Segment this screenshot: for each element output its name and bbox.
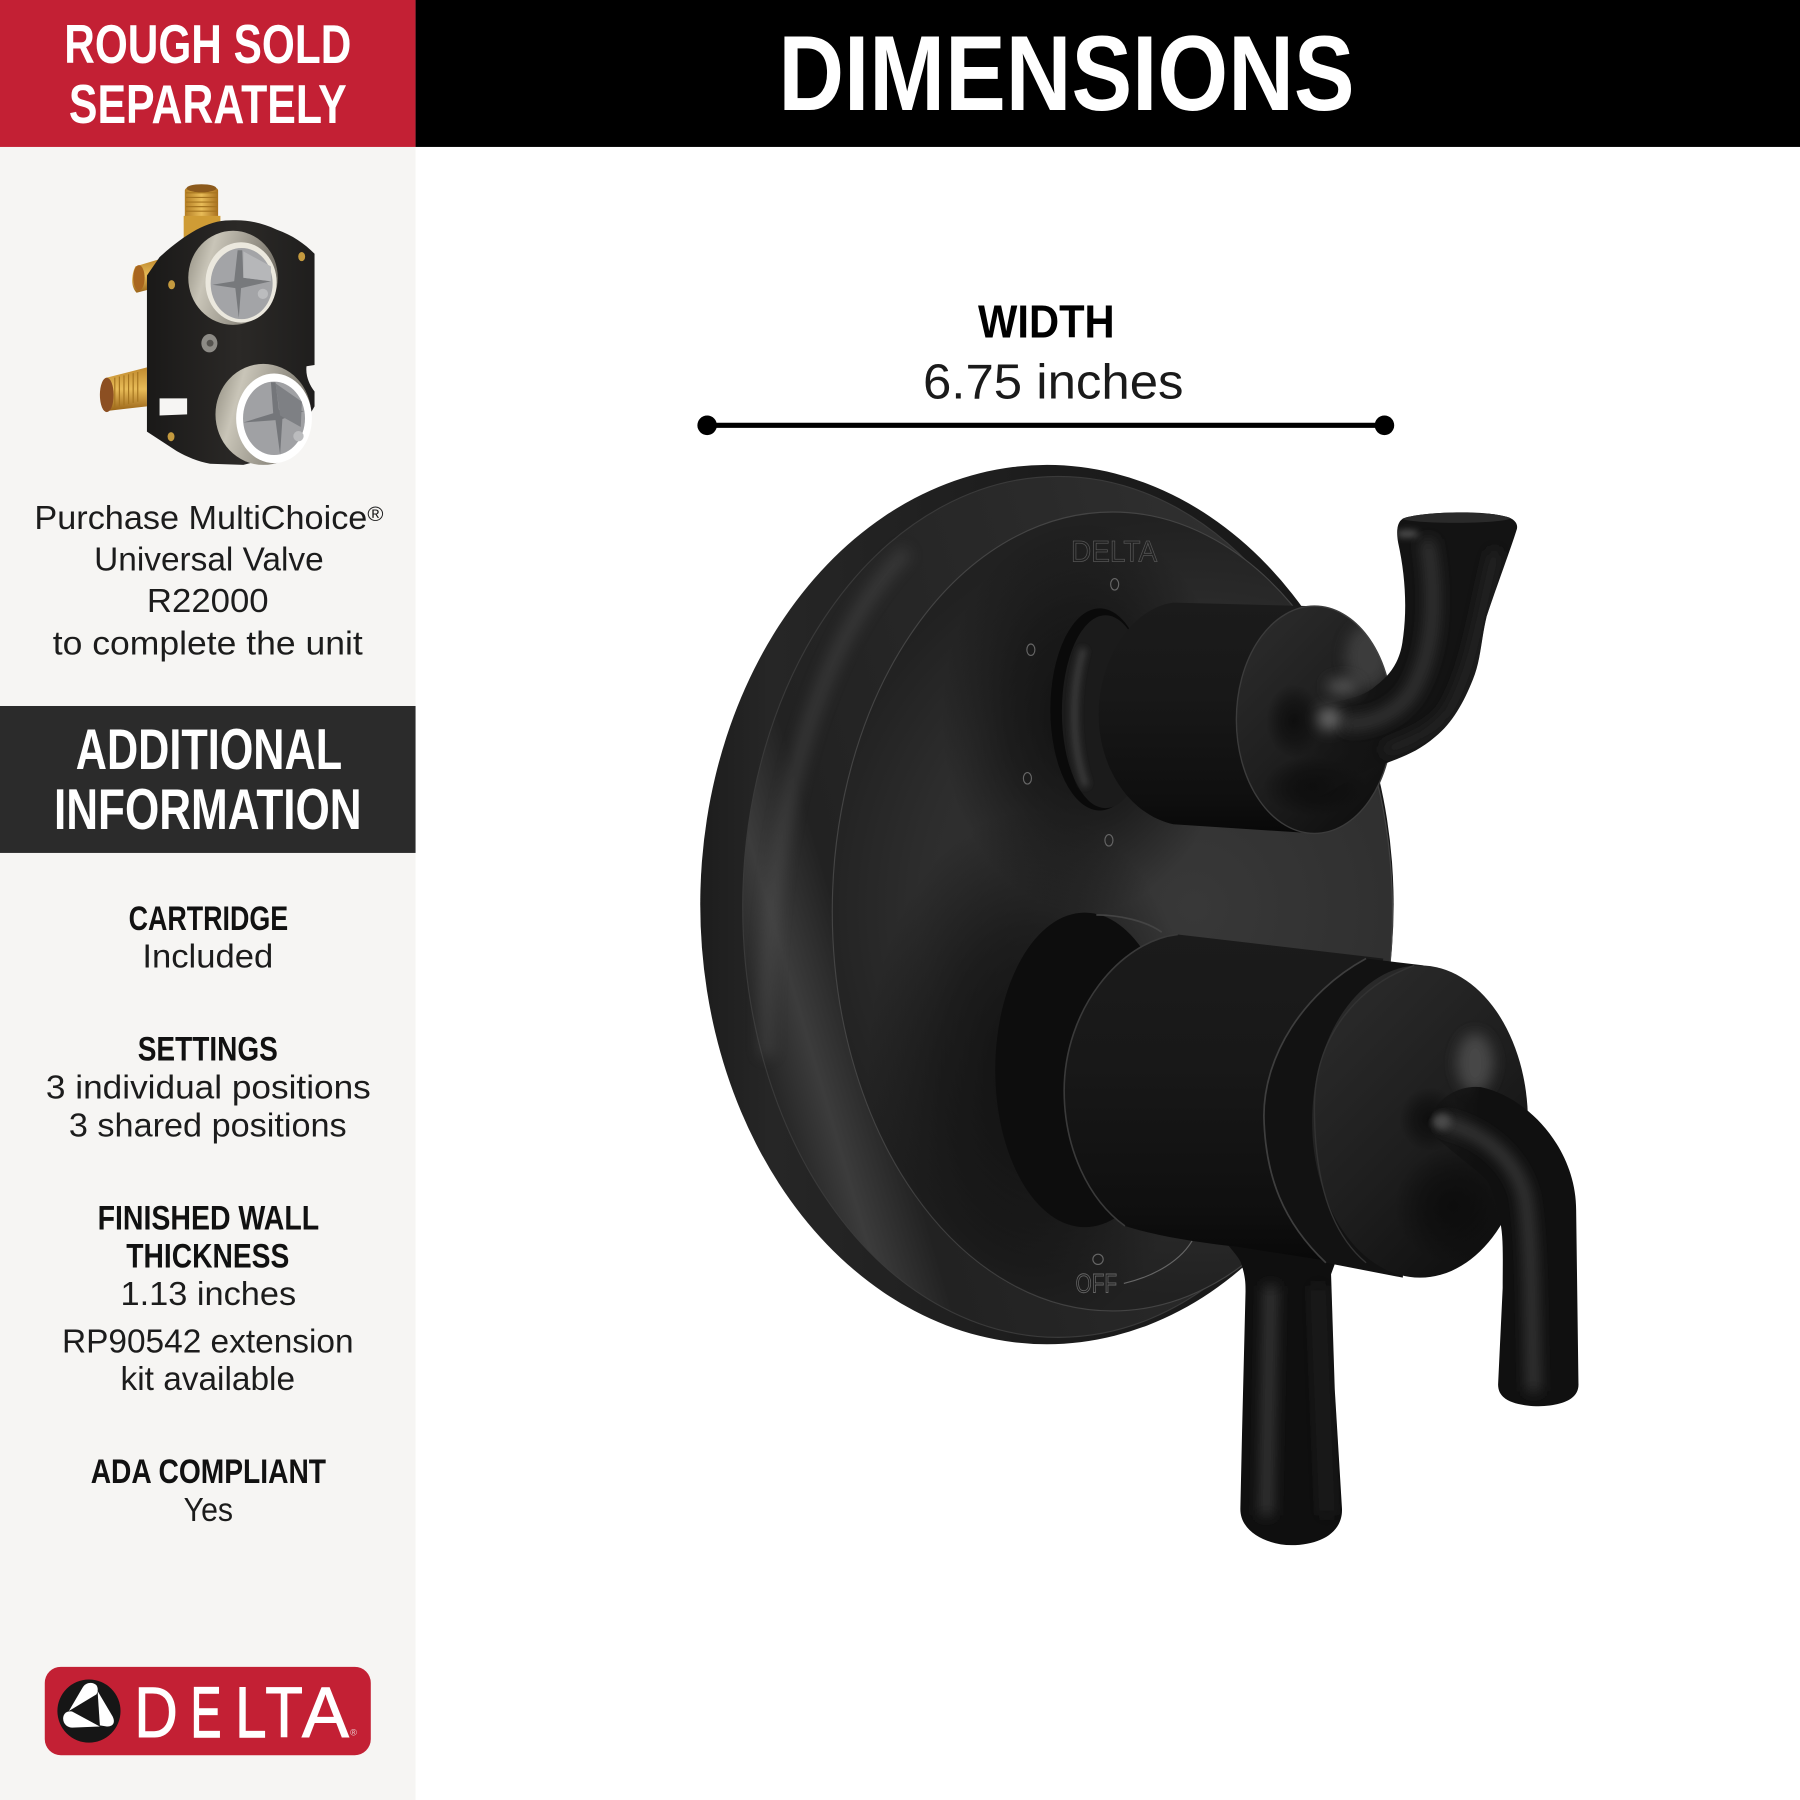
text: purchase note: Universal Valve xyxy=(94,542,324,579)
valve lower port xyxy=(215,364,312,465)
title: dimensions: DIMENSIONS xyxy=(778,13,1355,133)
title: dimensions xyxy=(416,0,1800,147)
upper lever highlights xyxy=(1343,513,1511,751)
banner: rough sold separately xyxy=(0,0,416,147)
spec: settings: 3 individual positions xyxy=(46,1070,371,1107)
plate shadows xyxy=(909,577,1172,1300)
valve brass nipples xyxy=(100,184,289,412)
logo: delta: E xyxy=(191,1674,222,1753)
spec: finished wall thickness: kit available xyxy=(121,1361,295,1398)
spec: settings: 3 shared positions xyxy=(69,1107,347,1144)
spec: finished wall thickness: RP90542 extension xyxy=(62,1323,354,1360)
lower right lever xyxy=(1428,1087,1578,1406)
logo: delta xyxy=(45,1667,371,1755)
banner: additional information xyxy=(0,706,416,853)
dimension: width label: WIDTH xyxy=(978,295,1115,347)
text: purchase note: Purchase MultiChoice xyxy=(34,500,367,537)
upper lever xyxy=(1286,512,1517,796)
spec: ada compliant: ADA COMPLIANT xyxy=(91,1453,326,1491)
logo: delta: ® xyxy=(350,1728,357,1738)
logo: delta: A xyxy=(302,1674,350,1753)
spec: settings xyxy=(46,1031,371,1144)
image: rough-in valve xyxy=(100,184,315,465)
dimension: width label xyxy=(923,296,1184,409)
spec: finished wall thickness: FINISHED WALL xyxy=(98,1199,319,1237)
spec: finished wall thickness xyxy=(62,1199,354,1398)
plate markings xyxy=(1023,535,1194,1299)
product: shower trim xyxy=(700,465,1578,1545)
text: purchase note: ® xyxy=(367,503,383,526)
spec: cartridge: Included xyxy=(142,939,273,976)
spec: ada compliant xyxy=(91,1453,326,1529)
lower cap shading xyxy=(1410,1030,1498,1214)
banner: rough sold separately: SEPARATELY xyxy=(69,73,347,135)
logo: delta: L xyxy=(235,1674,266,1753)
spec: finished wall thickness: THICKNESS xyxy=(126,1237,289,1275)
text: purchase note xyxy=(34,500,383,662)
lower knob down lever xyxy=(1228,1246,1342,1545)
spec: ada compliant: Yes xyxy=(184,1492,233,1529)
logo: delta: T xyxy=(265,1674,303,1753)
upper hub highlights xyxy=(1318,678,1359,730)
plate markings: OFF xyxy=(1076,1269,1117,1299)
logo: delta: D xyxy=(134,1674,178,1753)
text: purchase note: to complete the unit xyxy=(53,625,363,662)
trim plate xyxy=(700,465,1394,1344)
banner: additional information: INFORMATION xyxy=(54,778,362,842)
upper cap shading xyxy=(1275,626,1386,796)
banner: rough sold separately: ROUGH SOLD xyxy=(64,13,351,75)
spec: cartridge: CARTRIDGE xyxy=(129,900,288,938)
banner: additional information: ADDITIONAL xyxy=(76,718,342,782)
dimension: width label: 6.75 inches xyxy=(923,354,1184,409)
spec: cartridge xyxy=(129,900,288,976)
text: purchase note: R22000 xyxy=(147,583,269,620)
lower knob body xyxy=(995,913,1174,1227)
valve mounting plate xyxy=(147,220,315,465)
spec: finished wall thickness: 1.13 inches xyxy=(121,1276,296,1313)
spec: settings: SETTINGS xyxy=(138,1031,278,1069)
arrow: width line xyxy=(697,416,1394,435)
panel: left sidebar xyxy=(0,0,416,1800)
upper knob xyxy=(995,512,1578,1545)
lower right lever highlights xyxy=(1433,1114,1534,1391)
valve upper port xyxy=(188,231,278,325)
plate markings: DELTA xyxy=(1071,535,1157,568)
